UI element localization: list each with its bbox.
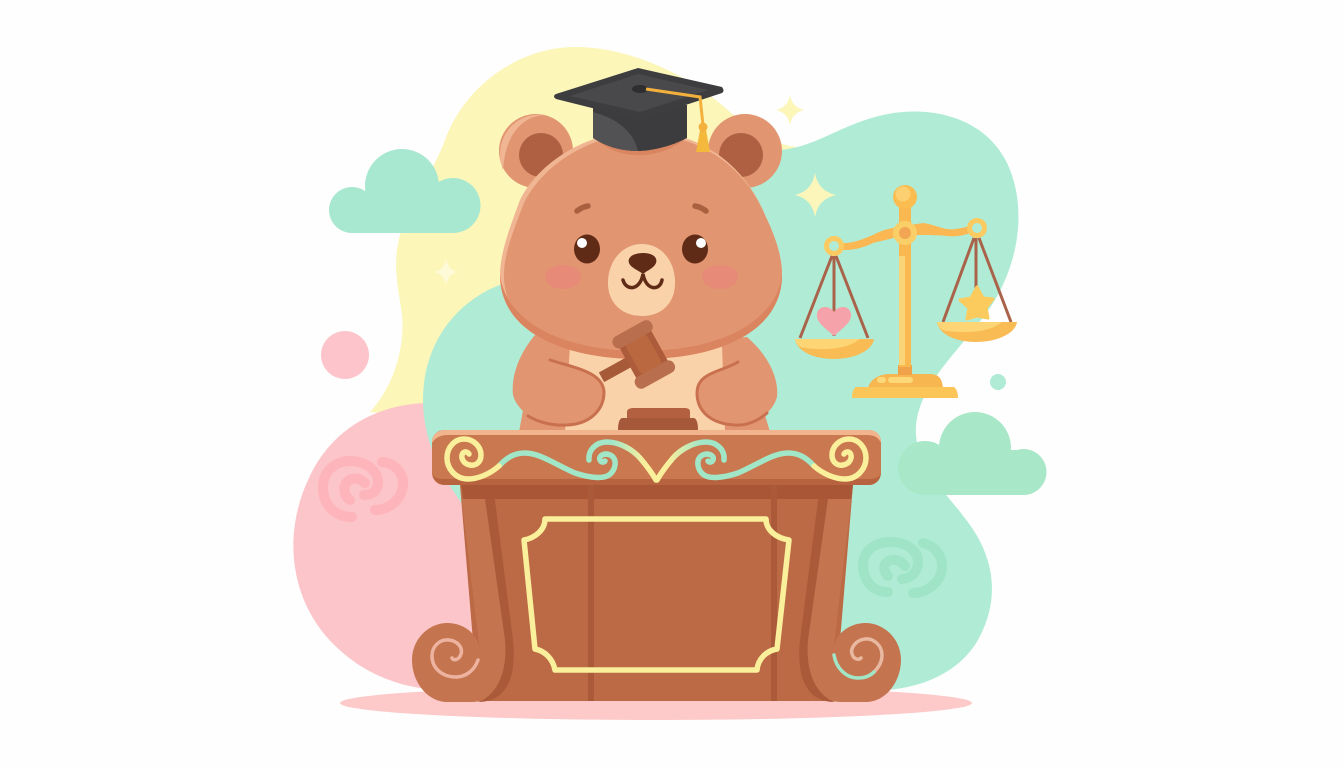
right scroll: [834, 639, 882, 678]
podium panel frame: [524, 519, 789, 670]
sparkle: left: [434, 259, 458, 285]
right pan strings: [943, 238, 1011, 322]
tassel: [696, 130, 710, 152]
bear muzzle: [608, 244, 675, 316]
scales: [795, 185, 1017, 398]
podium body: [460, 485, 853, 701]
bear cheeks: [545, 265, 581, 289]
podium ornament: right half: [657, 439, 866, 480]
swirl: pink: [323, 461, 403, 517]
cap base: [593, 105, 687, 151]
left pan strings: [800, 256, 868, 338]
cap shadow: [595, 138, 686, 155]
gavel handle: [599, 357, 632, 382]
cloud: top left: [329, 149, 480, 233]
gavel block: [627, 408, 690, 418]
podium ornament: left half: [447, 439, 656, 480]
bear mouth: [623, 274, 662, 288]
gavel caps: [610, 318, 655, 351]
podium top: [432, 430, 881, 485]
podium right leg: [805, 485, 901, 702]
gavel body: [619, 330, 668, 378]
scale base: [868, 374, 943, 388]
bear head: [504, 134, 782, 359]
tassel cord: [646, 89, 703, 125]
bear left arm: [513, 335, 604, 425]
blob: pink: [293, 403, 520, 690]
background blobs: [293, 47, 1018, 690]
bear right ear: [708, 114, 782, 188]
scale beam: [840, 223, 970, 250]
dot: pink: [321, 331, 369, 379]
icon: star: [960, 287, 993, 319]
cloud: right: [898, 412, 1046, 495]
bear right arm: [697, 337, 777, 425]
bear eyes: [574, 234, 600, 264]
sparkle: large: [795, 173, 836, 217]
graduation cap: [554, 68, 724, 155]
gavel: [587, 318, 677, 404]
dot: mint: [990, 374, 1006, 390]
icon: heart: [817, 307, 851, 336]
cap button: [632, 85, 648, 93]
scale pillar: [899, 205, 911, 367]
bear torso: [519, 345, 770, 432]
podium shadow band: [461, 485, 853, 499]
left scroll: [432, 640, 478, 677]
bear eyebrows: [577, 206, 588, 211]
bear left ear: [499, 114, 573, 188]
bear head rim: [500, 131, 782, 359]
blob: yellow: [370, 47, 810, 430]
podium: [412, 430, 901, 702]
right pan: [937, 322, 1017, 342]
bear: [499, 114, 782, 432]
cap board: [554, 68, 724, 120]
bear belly: [565, 345, 725, 432]
left pan: [795, 339, 874, 359]
floor shadow: [340, 686, 972, 720]
sparkle: top: [776, 95, 804, 125]
podium left leg: [412, 485, 508, 702]
blob: mint: [423, 112, 1018, 690]
bear nose: [629, 253, 656, 274]
swirl: mint: [863, 542, 942, 593]
podium grooves: [588, 485, 594, 701]
